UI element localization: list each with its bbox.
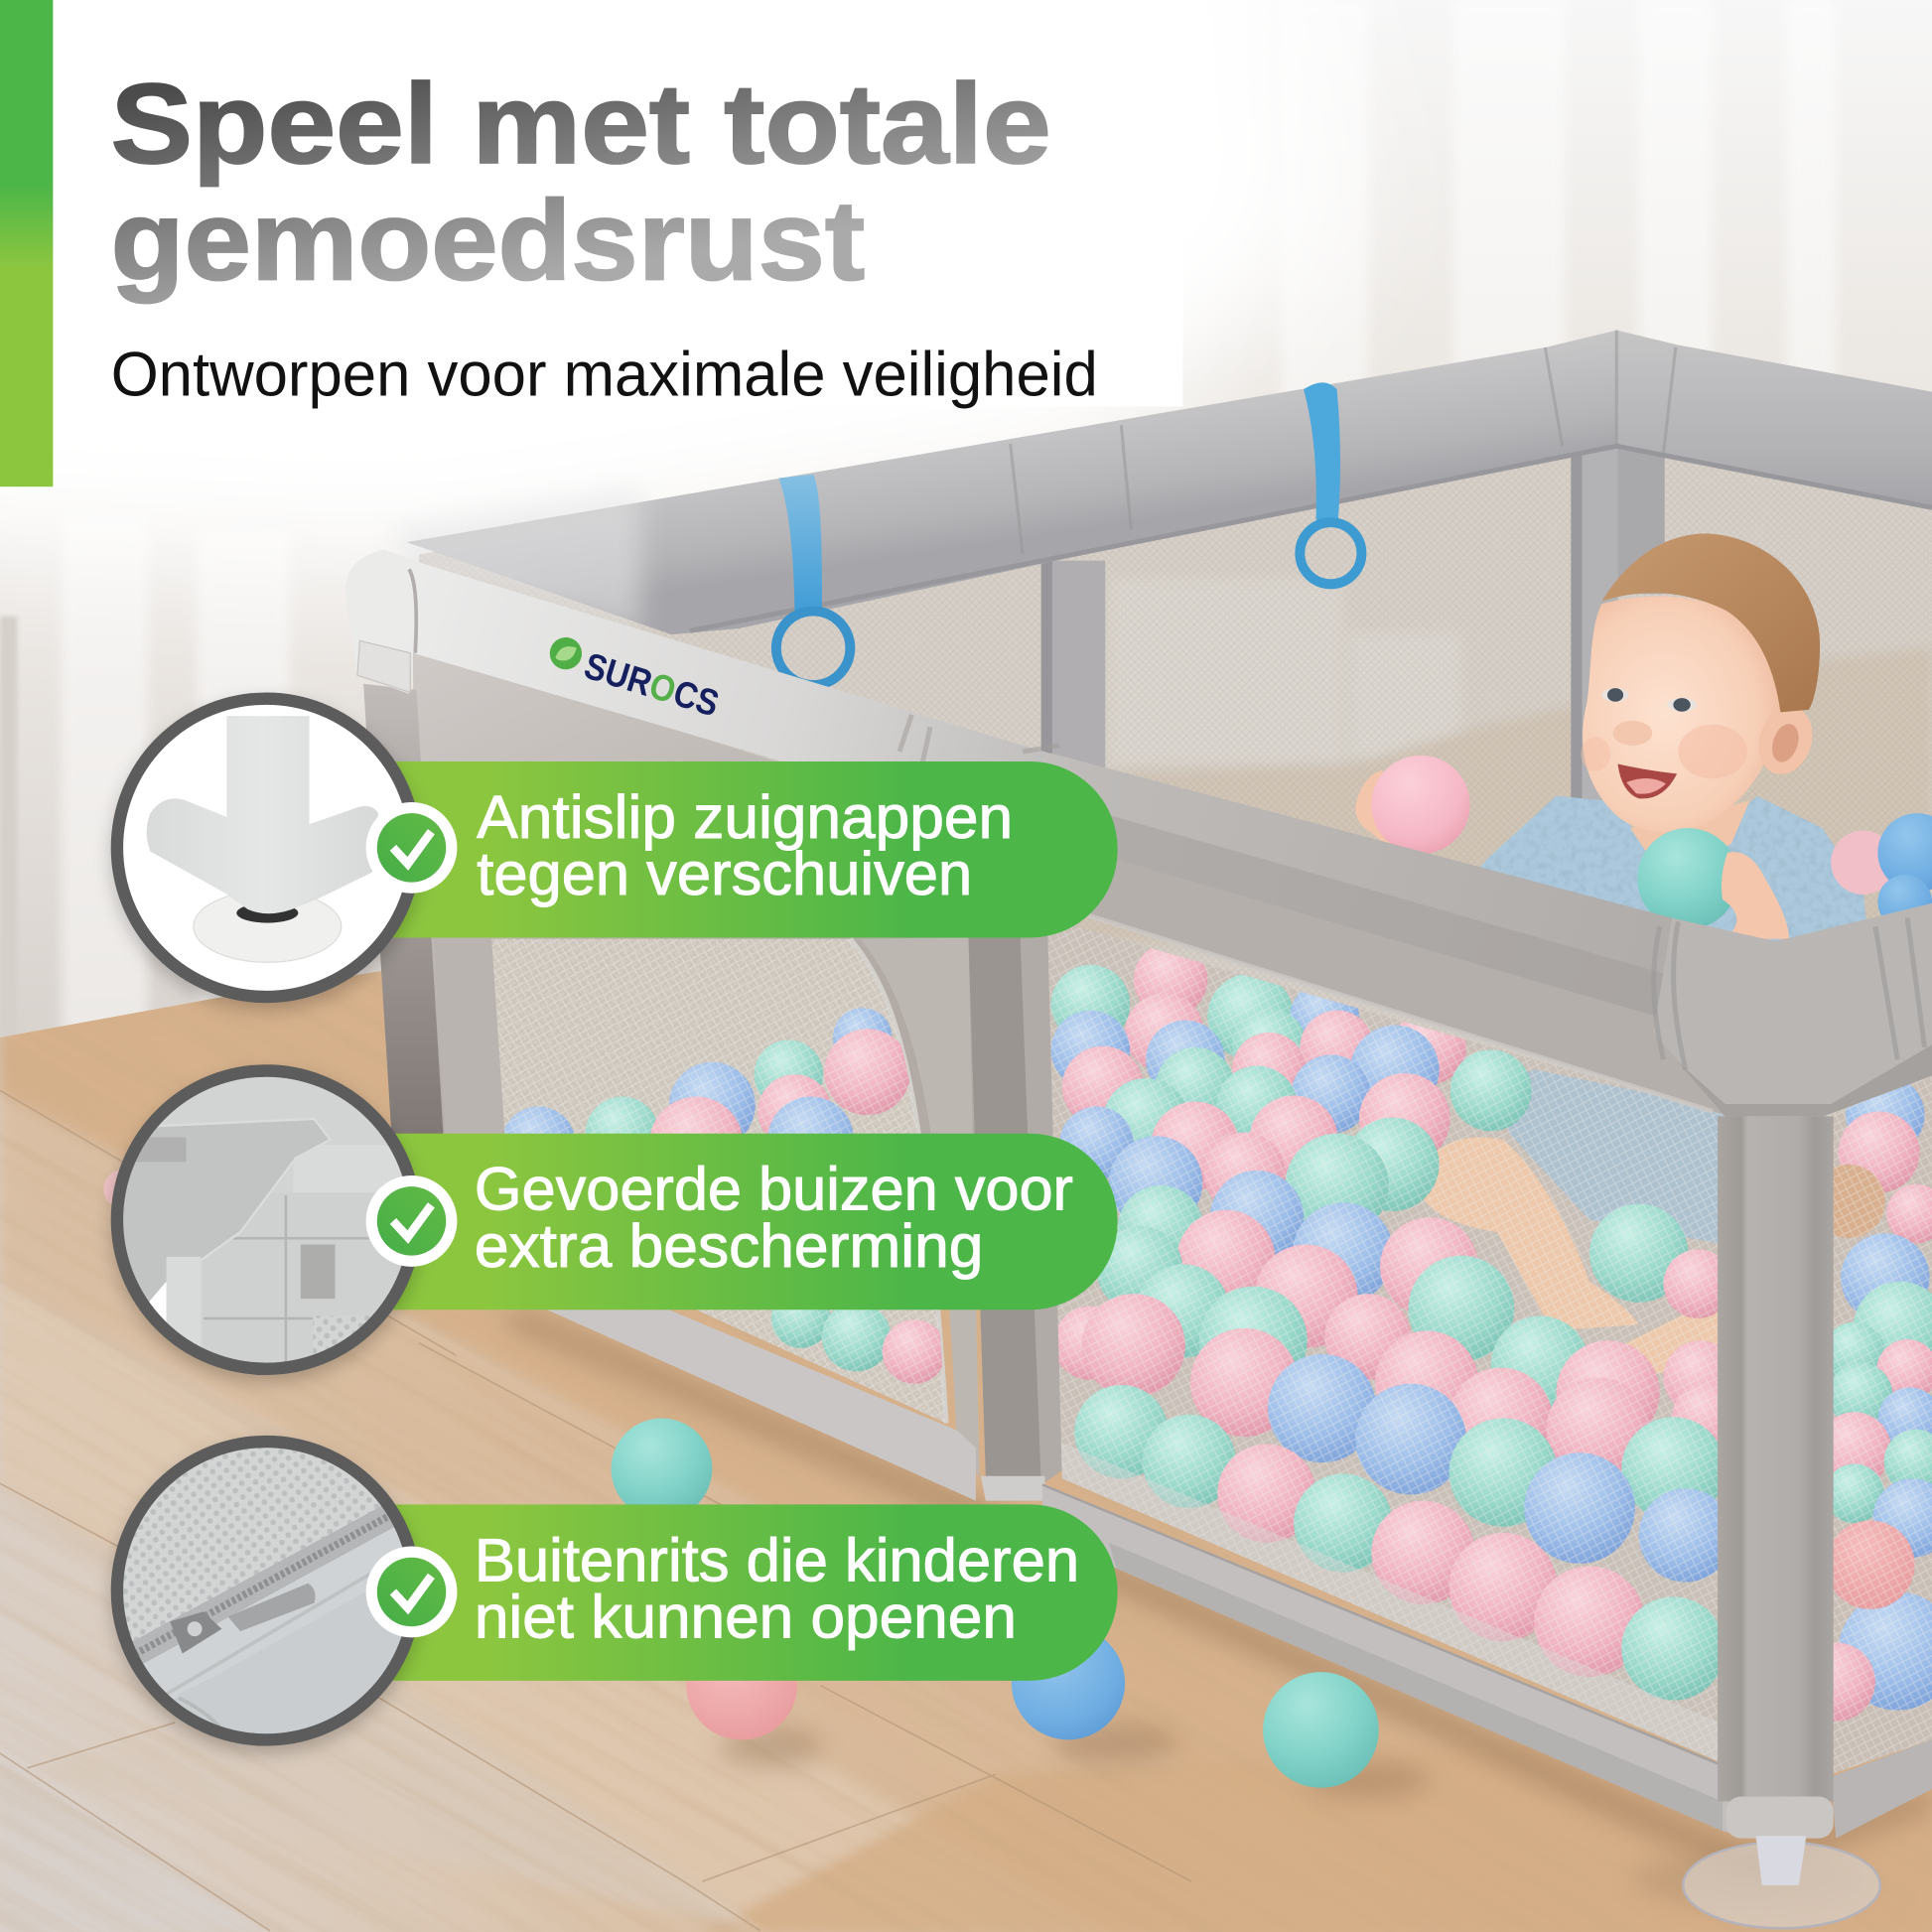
clear screw [1756,1836,1806,1885]
top near rail and corner [345,550,1932,1116]
balls inside front mesh [1042,911,1741,1774]
shadow [1632,1852,1866,1906]
balls behind door mesh [469,936,961,1430]
base joint [981,1476,1044,1501]
rail underside shade [1059,801,1663,1017]
sweater [1453,796,1867,973]
front bottom rail [1042,1484,1932,1839]
inset: suction foot [117,699,415,997]
joint [1726,1796,1834,1839]
title: Speel met totale [111,62,1051,188]
curtain hem [0,617,17,1072]
baby body behind mesh [1417,1069,1725,1374]
inset: padded tube [117,1070,425,1380]
eyes [1601,688,1697,712]
pink ball [1371,756,1470,854]
callout 3: outside zipper [111,1442,1118,1762]
title: gemoedsrust [111,179,865,305]
baby [1355,533,1932,973]
left end fade [394,486,640,628]
back long rail [407,331,1616,634]
hair [1601,533,1820,712]
corner junction [1654,903,1932,1116]
ring 2 [1300,382,1361,584]
pill [308,1504,1118,1681]
left bottom rail [547,1310,976,1501]
logo [543,633,724,725]
post tube [1718,1116,1834,1801]
callout 2: padded tubes [103,1070,1118,1380]
balls right of corner post [1796,1059,1932,1799]
ear [1750,700,1821,781]
playpen back rails and interior [394,331,1932,1232]
mouth [1618,763,1677,798]
left panel fabric [363,647,1064,1501]
label: niet kunnen openen [475,1583,1017,1650]
subtitle: Ontworpen voor maximale veiligheid [111,340,1098,409]
valance [1059,828,1725,1115]
icon: logo leaf [546,633,586,673]
label [475,1156,1073,1280]
pink ball peeking behind inset [103,1170,143,1208]
logo: SUROCS [580,644,724,725]
background: curtains and wall [0,0,1932,1109]
right hand [1722,852,1789,939]
callout 1: suction cups [117,699,1118,997]
check badge [366,1547,457,1637]
label: tegen verschuiven [477,840,972,907]
green accent bar [0,0,53,486]
label [477,783,1013,907]
hanging rings [776,382,1361,685]
back short rail [1616,331,1932,507]
near long rail [345,550,1672,1017]
label: Gevoerde buizen voor [475,1156,1073,1223]
label: extra bescherming [475,1212,983,1280]
nose and cheeks [1581,721,1747,778]
shadows [719,1724,1430,1798]
mint ball [1637,828,1738,929]
left hand [1355,770,1392,850]
floor balls [612,1418,1430,1798]
check badge [366,1175,457,1267]
pill [308,1134,1118,1310]
shadow under pen [505,1307,1932,1879]
pill [308,761,1118,937]
title [111,62,1051,305]
neck [1630,801,1749,878]
inset: zipper [111,1442,425,1762]
face [1583,596,1787,832]
balls behind baby [1831,813,1932,929]
back inner post [1041,446,1665,816]
label [475,1526,1079,1650]
suction cup [1683,1842,1880,1928]
corner post and foot [1632,1116,1880,1928]
wooden floor [0,971,1932,1932]
check badge [366,802,457,894]
ring 1 [776,475,850,685]
label: Antislip zuignappen [477,783,1013,851]
label: Buitenrits die kinderen [475,1526,1079,1593]
